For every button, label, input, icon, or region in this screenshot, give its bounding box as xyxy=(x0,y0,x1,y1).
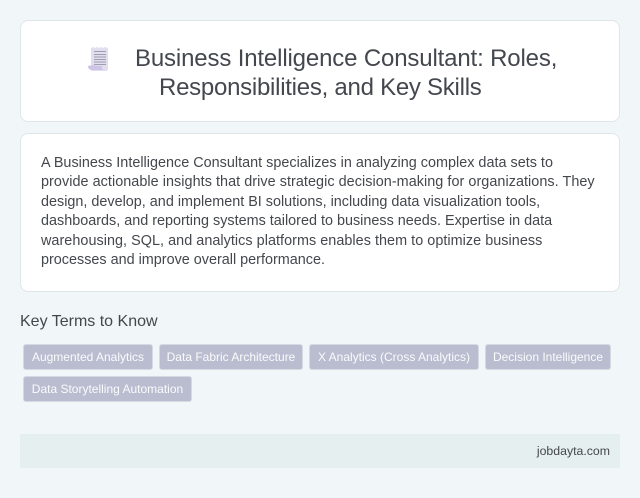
tag: augmented analytics xyxy=(23,344,153,370)
description text xyxy=(41,155,595,268)
description text: design, develop, and implement BI solutions, including data visualization tools, xyxy=(41,194,540,210)
panel: description card xyxy=(20,133,620,292)
footer source: jobdayta.com xyxy=(537,444,610,458)
title xyxy=(135,45,557,101)
description text: warehousing, SQL, and analytics platforms enables them to optimize business xyxy=(41,233,542,249)
tag: x analytics: X Analytics (Cross Analytics) xyxy=(318,350,470,364)
title: Business Intelligence Consultant: Roles, xyxy=(135,45,557,72)
description text: provide actionable insights that drive strategic decision-making for organizations. They xyxy=(41,174,595,190)
tag: augmented analytics: Augmented Analytics xyxy=(32,350,144,364)
title: Responsibilities, and Key Skills xyxy=(159,74,482,101)
tag: data storytelling automation: Data Storytelling Automation xyxy=(32,382,183,396)
tag: data fabric architecture: Data Fabric Architecture xyxy=(167,350,295,364)
tag: decision intelligence xyxy=(485,344,611,370)
description text: A Business Intelligence Consultant specializes in analyzing complex data sets to xyxy=(41,155,553,171)
tag: x analytics xyxy=(309,344,479,370)
description text: dashboards, and reporting systems tailored to business needs. Expertise in data xyxy=(41,213,552,229)
footer bar xyxy=(20,434,620,468)
heading: key terms: Key Terms to Know xyxy=(20,313,158,330)
panel: title card xyxy=(20,20,620,122)
tag list xyxy=(23,344,611,402)
icon: document receipt xyxy=(88,47,108,71)
tag: decision intelligence: Decision Intelligence xyxy=(493,350,603,364)
tag: data fabric architecture xyxy=(159,344,303,370)
description text: processes and improve overall performance. xyxy=(41,252,325,268)
tag: data storytelling automation xyxy=(23,376,192,402)
